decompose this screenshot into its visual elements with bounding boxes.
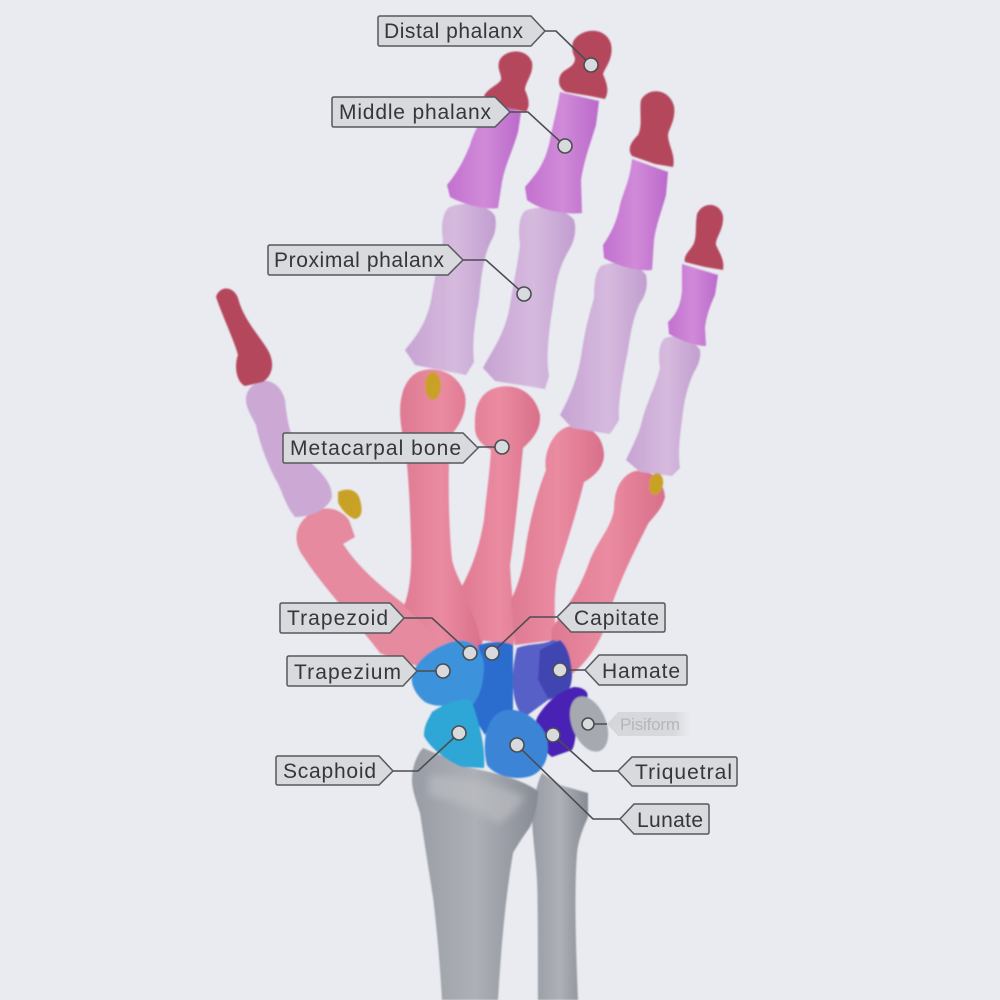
label: Triquetral: Triquetral	[635, 761, 732, 784]
label: Middle phalanx	[332, 97, 572, 153]
label: Lunate: Lunate	[637, 809, 703, 832]
label: Distal phalanx	[378, 16, 598, 72]
proximal phalanx finger 2	[483, 208, 575, 389]
label: Scaphoid: Scaphoid	[283, 760, 376, 783]
label: Middle phalanx: Middle phalanx	[339, 101, 492, 124]
ulna	[532, 773, 588, 1000]
middle phalanx finger 4	[668, 264, 718, 346]
distal phalanx finger 2	[559, 31, 612, 99]
label: Trapezoid	[280, 603, 477, 660]
label: Scaphoid	[276, 726, 466, 785]
label: Trapezium: Trapezium	[294, 661, 401, 684]
middle phalanx finger 2	[525, 92, 599, 213]
middle phalanx finger 3	[603, 159, 668, 270]
capitate	[468, 642, 513, 735]
label: Pisiform (fading in)	[582, 712, 690, 736]
metacarpal finger 1	[400, 369, 483, 650]
metacarpal finger 3	[511, 426, 604, 645]
label: Capitate: Capitate	[574, 607, 659, 630]
hamate hook	[538, 640, 572, 698]
label: Trapezium	[287, 656, 450, 686]
distal phalanx finger 3	[630, 91, 674, 167]
proximal phalanx thumb	[246, 381, 332, 517]
hamate	[513, 640, 572, 717]
pisiform	[562, 691, 616, 757]
radius	[412, 748, 538, 1000]
middle phalanx finger 1	[447, 103, 521, 208]
skeleton illustration	[216, 31, 723, 1000]
thumb metacarpal	[296, 508, 480, 668]
label: Triquetral	[546, 728, 737, 786]
trapezium and trapezoid	[412, 641, 484, 708]
sesamoid bones	[338, 372, 665, 519]
label: Hamate	[553, 655, 687, 685]
label: Pisiform (fading in): Pisiform	[620, 715, 680, 734]
label: Distal phalanx: Distal phalanx	[384, 20, 524, 43]
label: Capitate	[485, 603, 665, 660]
proximal phalanx finger 1	[405, 204, 496, 375]
scaphoid	[424, 699, 484, 768]
proximal phalanx finger 4	[626, 336, 700, 476]
metacarpal finger 2	[460, 386, 540, 645]
triquetral	[535, 687, 588, 757]
distal phalanx finger 4	[685, 205, 723, 270]
label: Lunate	[510, 738, 709, 834]
distal phalanx finger 1	[484, 51, 532, 112]
label: Metacarpal bone	[283, 433, 509, 463]
lunate	[485, 710, 548, 778]
label: Metacarpal bone: Metacarpal bone	[290, 437, 461, 460]
label: Proximal phalanx	[268, 245, 531, 301]
distal phalanx thumb	[216, 288, 272, 386]
metacarpal finger 4	[551, 471, 665, 674]
radius highlight	[428, 775, 525, 824]
proximal phalanx finger 3	[560, 263, 647, 434]
label: Trapezoid: Trapezoid	[287, 607, 388, 630]
label: Proximal phalanx: Proximal phalanx	[274, 249, 444, 272]
label: Hamate: Hamate	[602, 660, 680, 683]
